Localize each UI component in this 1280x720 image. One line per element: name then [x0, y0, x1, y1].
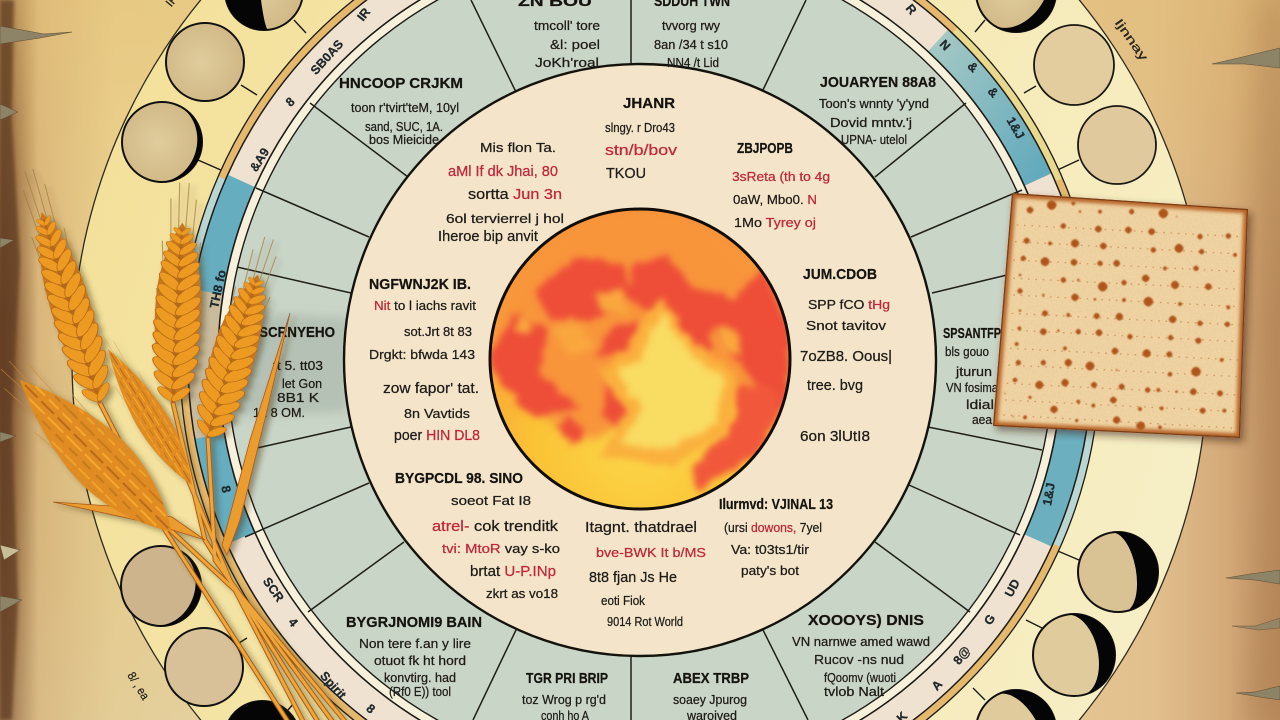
- moon: upper left partial: [221, 0, 303, 34]
- text block: bottom: [585, 520, 706, 629]
- moon: pale yellow core: [615, 313, 723, 450]
- text block: lower right: (ursi dowons, 7yel: [724, 521, 822, 535]
- text block: upper right: 0aW, Mbo0. N: [733, 193, 817, 207]
- matzo: perforation rows: [1003, 225, 1240, 428]
- band label: lower left: 8: [218, 484, 233, 494]
- sector: upper left: sand, SUC, 1A.: [365, 120, 443, 134]
- text block: right: JUM.CDOB: [803, 266, 877, 283]
- sector: top left: [518, 0, 600, 70]
- inner circle texts: [369, 95, 892, 629]
- outer arc labels: [125, 0, 1151, 703]
- sector: top left: tmcoll' tore: [534, 19, 600, 33]
- wheat ear: right: [182, 231, 294, 446]
- sector: left: 12 8 OM.: [253, 406, 305, 420]
- sector: right: SPSANTFP: [943, 325, 1001, 342]
- text block: lower right: paty's bot: [741, 564, 800, 578]
- sector: upper left: [339, 75, 463, 147]
- sector: top right: tvvorg rwy: [662, 19, 721, 33]
- sector: right: [943, 325, 1001, 427]
- sage sector ring: [227, 0, 1053, 720]
- text block: left: Drgkt: bfwda 143: [369, 348, 475, 362]
- sector: upper left: HNCOOP CRJKM: [339, 75, 463, 92]
- text block: upper left: [438, 141, 564, 245]
- wheat ear: lower pale: [86, 327, 205, 493]
- sector: bottom right: soaey Jpurog: [673, 693, 747, 707]
- band label: upper right: 1&J: [1004, 115, 1027, 141]
- text block: left: Nit to l iachs ravit: [374, 299, 477, 313]
- band label: upper left: 8: [283, 94, 298, 110]
- sector texts: [253, 0, 1001, 720]
- sector: upper right: Dovid mntv.'j: [830, 116, 912, 130]
- sector: left: SCRNYEHO: [259, 324, 335, 341]
- sector: left: [253, 324, 335, 420]
- band label: lower right: A: [929, 677, 945, 693]
- band label: lower left: SCR: [260, 575, 287, 605]
- sector: lower left: otuot fk ht hord: [374, 654, 466, 668]
- text block: top: [605, 95, 678, 182]
- text block: lower right: Ilurmvd: VJINAL 13: [719, 496, 833, 513]
- band label: lower right: G: [981, 612, 998, 628]
- moon: small orange highlights: [518, 288, 743, 357]
- text block: lower left: [395, 470, 560, 601]
- sector: left: 8B1 K: [277, 391, 320, 405]
- sector: top right: [654, 0, 730, 70]
- sector: right: VN fosima: [946, 381, 998, 395]
- band label: lower left: 4: [285, 615, 301, 630]
- band label: upper left: [207, 5, 373, 310]
- text block: lower left: tvi: MtoR vay s-ko: [442, 542, 560, 556]
- sector: left: tt 5. tt03: [273, 359, 323, 373]
- text block: upper right: 1Mo Tyrey oj: [734, 216, 816, 230]
- moon: red patches: [488, 255, 792, 490]
- matzo: baked spots: [1003, 199, 1238, 432]
- moon: lower right crescent: [1033, 606, 1123, 696]
- text block: upper left: sortta Jun 3n: [468, 187, 562, 203]
- band label: upper left: TH8 fo: [207, 268, 229, 310]
- moon: lower right gibbous: [1078, 526, 1164, 612]
- text block: top: slngy. r Dro43: [605, 121, 675, 135]
- blue band segment: upper right: [938, 40, 1038, 180]
- text block: upper left: Iheroe bip anvit: [438, 229, 538, 245]
- text block: right: 7oZB8. Oous|: [800, 349, 892, 365]
- text block: left: [369, 276, 480, 444]
- sector: upper left: toon r'tvirt'teM, 10yl: [351, 101, 459, 115]
- text block: upper left: aMl If dk Jhai, 80: [448, 164, 558, 180]
- band label: upper right: &: [965, 59, 981, 75]
- band label: upper right: [903, 1, 1027, 141]
- sector: lower left: konvtirg. had: [384, 671, 456, 685]
- sector: upper right: UPNA- utelol: [841, 133, 907, 147]
- band label: lower left: Spirit: [317, 669, 349, 702]
- band label: lower right: [894, 482, 1058, 720]
- sector: top right: NN4 /t Lid: [667, 56, 719, 70]
- text block: top: JHANR: [623, 95, 675, 112]
- sector: lower left: BYGRJNOMI9 BAIN: [346, 614, 482, 631]
- text block: upper left: Mis flon Ta.: [480, 141, 556, 155]
- band label: lower left: 8: [363, 701, 378, 717]
- sector: top left: JoKh'roal: [535, 56, 599, 70]
- band label: upper right: R: [903, 1, 919, 17]
- text block: right: tree. bvg: [807, 378, 863, 394]
- moon phase connector lines: [198, 20, 1079, 710]
- text block: left: poer HIN DL8: [394, 428, 480, 444]
- wheat ear: center: [145, 181, 213, 405]
- band label: upper left: &A9: [247, 146, 272, 174]
- text block: upper left: 6ol tervierrel j hol: [446, 212, 564, 226]
- calendar band ring: [180, 0, 1100, 720]
- sector: upper left: bos Mieicide: [369, 133, 439, 147]
- sector: top right: 8an /34 t s10: [654, 38, 728, 52]
- sector: right: bls gouo: [945, 345, 989, 359]
- text block: bottom: eoti Fiok: [601, 594, 646, 608]
- wheat bundle: [0, 163, 348, 720]
- sector: lower left: Non tere f.an y lire: [359, 637, 471, 651]
- sector: right: jturun: [955, 365, 992, 379]
- wheat leaves: [53, 313, 290, 555]
- text block: right: SPP fCO tHg: [808, 298, 890, 312]
- blue band segment: lower left: [210, 436, 241, 538]
- sector: top left: &l: poel: [550, 38, 600, 52]
- blue band segment: upper left: [208, 181, 242, 292]
- text block: lower left: atrel- cok trenditk: [432, 519, 559, 535]
- outer arc labels: Ijnnay: [1112, 16, 1151, 63]
- text block: top: TKOU: [606, 166, 646, 182]
- sector: lower right: XOOOYS) DNIS: [808, 612, 924, 629]
- text block: bottom: 9014 Rot World: [607, 615, 683, 629]
- band label: lower right: 1&J: [1040, 482, 1058, 507]
- moon: left thin crescent: [122, 102, 210, 190]
- moon: upper left full: [166, 23, 244, 101]
- text block: upper right: ZBJPOPB: [737, 140, 793, 157]
- sector: lower right: fQoomv (wuoti: [824, 671, 896, 685]
- text block: lower left: zkrt as vo18: [486, 587, 558, 601]
- text block: right: Snot tavitov: [806, 319, 887, 333]
- moon: bottom left partial: [224, 701, 300, 720]
- sector divider spokes: [237, 0, 1042, 720]
- moon: right full: [1078, 106, 1156, 184]
- sector: upper right: [819, 74, 936, 147]
- text block: lower left: soeot Fat I8: [451, 494, 531, 508]
- matzo: grain texture: [1027, 207, 1233, 434]
- matzo: toasted edge: [993, 193, 1248, 438]
- text block: lower left: brtat U-P.INp: [470, 564, 556, 580]
- text block: left: zow fapor' tat.: [383, 381, 479, 397]
- sector: bottom left: TGR PRI BRIP: [526, 670, 608, 687]
- text block: lower right: Va: t03ts1/tir: [731, 543, 809, 557]
- moon: upper right full: [1034, 25, 1114, 105]
- moon: top right partial: [976, 0, 1072, 48]
- sector: lower left: [346, 614, 482, 699]
- sector: lower right: [792, 612, 930, 699]
- text block: left: sot.Jrt 8t 83: [404, 325, 472, 339]
- moon: lower left crescent: [121, 546, 211, 636]
- text block: right: 6on 3lUtI8: [800, 429, 870, 445]
- band label: upper right: N: [937, 37, 953, 53]
- text block: top: stn/b/bov: [605, 143, 678, 159]
- sector: lower right: Rucov -ns nud: [814, 653, 904, 667]
- moon: orange upper wash: [494, 249, 756, 444]
- text block: bottom: Itagnt. thatdrael: [585, 520, 697, 536]
- text block: upper right: [732, 140, 830, 230]
- band label: lower left: [218, 484, 378, 717]
- moon: orange halo around core: [597, 297, 737, 467]
- central blood moon: [488, 209, 792, 509]
- text block: upper right: 3sReta (th to 4g: [732, 170, 830, 184]
- text block: lower right: [719, 496, 833, 578]
- moon: lower left full: [165, 628, 243, 706]
- band label: upper left: SB0AS: [308, 37, 346, 77]
- text block: right: [800, 266, 892, 445]
- sector: bottom left: [522, 670, 608, 720]
- wheat stems: [100, 403, 348, 720]
- band label: lower right: UD: [1002, 577, 1023, 599]
- sector: lower left: (Rf0 E)) tool: [389, 685, 451, 699]
- moon: mottled surface in crop coordinates: [492, 248, 788, 494]
- band label: lower right: 8@: [950, 644, 973, 667]
- inner cream circle: [344, 64, 936, 656]
- wheat ear: far left: [5, 163, 124, 411]
- sector: lower right: VN narnwe amed wawd: [792, 635, 930, 649]
- sector: bottom right: ABEX TRBP: [673, 670, 749, 687]
- band label: upper left: IR: [354, 5, 373, 24]
- band label: upper right: &: [985, 84, 1001, 100]
- text block: bottom: 8t8 fjan Js He: [589, 570, 677, 586]
- matzo cracker: [985, 185, 1255, 445]
- text block: left: NGFWNJ2K IB.: [369, 276, 471, 293]
- sector: bottom left: toz Wrog p rg'd: [522, 693, 606, 707]
- text block: lower left: BYGPCDL 98. SINO: [395, 470, 523, 487]
- outer arc labels: 8/ , ea: [125, 669, 152, 703]
- sector: right: aea: [972, 413, 992, 427]
- moon: bottom right partial: [976, 675, 1071, 720]
- sector: upper right: Toon's wnnty 'y'ynd: [819, 97, 929, 111]
- sector: right: ldial: [966, 398, 994, 412]
- text block: bottom: bve-BWK It b/MS: [596, 546, 706, 560]
- blue band segment: lower right: [1038, 322, 1077, 540]
- sector: upper right: JOUARYEN 88A8: [820, 74, 936, 91]
- sector: lower right: tvlob Nalt: [824, 685, 885, 699]
- wheat ear: lower feathery: [0, 344, 193, 553]
- sector: left: let Gon: [282, 377, 322, 391]
- text block: left: 8n Vavtids: [404, 407, 470, 421]
- sector: bottom right: [673, 670, 749, 720]
